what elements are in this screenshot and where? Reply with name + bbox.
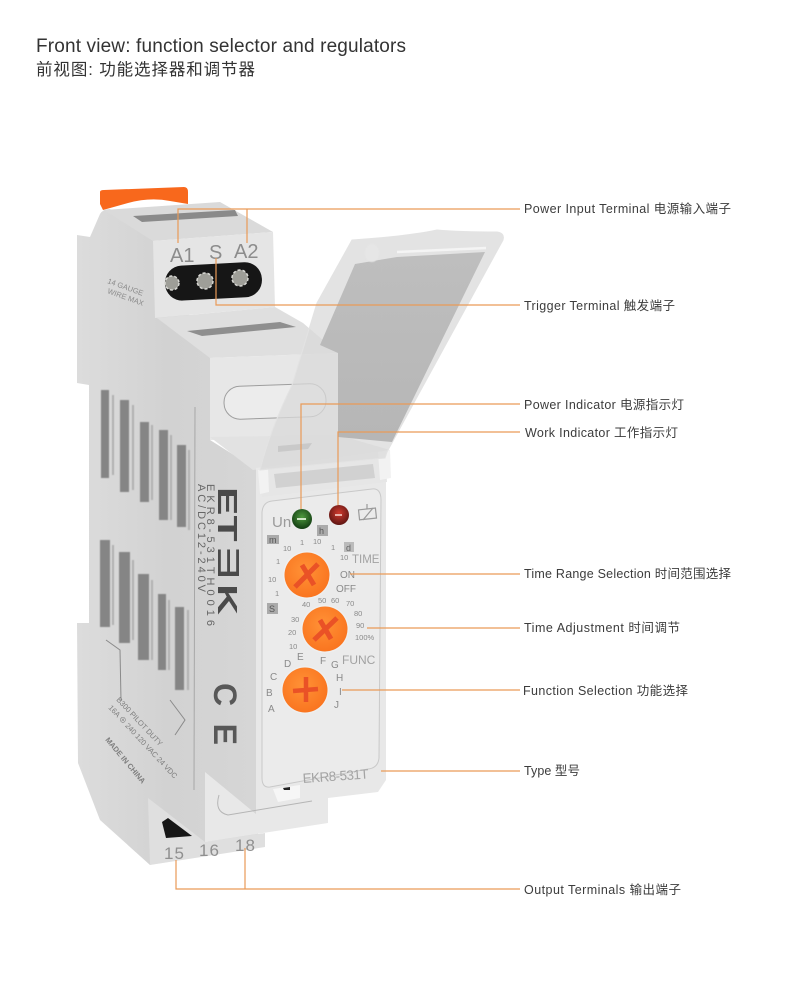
function scale: J <box>334 700 339 711</box>
time adjustment scale: 80 <box>354 609 362 618</box>
wiring and rating text: 16A ⊕ 240 120 VAC 24 VDC <box>107 703 180 781</box>
terminal labels: A1 <box>170 245 194 267</box>
function scale: G <box>331 660 339 671</box>
side specification table <box>100 390 190 690</box>
brand and model text on side: CE <box>207 683 243 745</box>
wire gauge text: 14 GAUGE <box>106 276 145 298</box>
device: relay illustration <box>77 187 503 865</box>
side housing <box>77 209 258 865</box>
time dial scale: 1 <box>275 589 279 598</box>
bottom terminal block <box>148 798 265 865</box>
wiring and rating text: B300 PILOT DUTY <box>115 695 165 748</box>
function scale: F <box>320 656 326 667</box>
leader: power indicator <box>301 404 520 509</box>
leader: output <box>176 848 520 889</box>
leader: time range <box>350 573 520 575</box>
leader: time adjustment <box>367 627 520 629</box>
time adjustment scale <box>288 596 375 651</box>
title: 前视图: 功能选择器和调节器 <box>36 60 256 79</box>
transparent lid <box>260 230 503 470</box>
output terminal numbers: 18 <box>235 836 255 855</box>
function scale: E <box>297 652 304 663</box>
hinge strip <box>258 450 387 497</box>
range letters <box>267 525 354 614</box>
function scale: A <box>268 704 275 715</box>
brand and model text on side: ET∃K <box>212 487 243 615</box>
relay symbol <box>359 504 376 520</box>
brand and model text on side: EKR8-531TH0016 <box>204 484 216 626</box>
leader: trigger <box>216 258 520 305</box>
time adjustment scale: 90 <box>356 621 364 630</box>
time dial scale: 10 <box>313 537 321 546</box>
wiring and rating text <box>103 640 185 786</box>
range letters: S <box>269 604 275 614</box>
wiring and rating text: MADE IN CHINA <box>103 736 148 786</box>
time adjustment scale: 60 <box>331 596 339 605</box>
label: work indicator: Work Indicator 工作指示灯 <box>525 425 678 440</box>
label: time range selection: Time Range Selection 时间范围选择 <box>524 567 731 581</box>
time adjustment dial <box>301 605 349 653</box>
lower block <box>157 307 390 470</box>
function scale <box>266 652 376 715</box>
orange release tab <box>100 187 188 210</box>
power LED green <box>292 509 312 529</box>
time adjustment scale: 70 <box>346 599 354 608</box>
range letters: d <box>346 543 351 553</box>
brand and model text on side: AC/DC12-240V <box>195 484 207 593</box>
callout labels <box>523 201 731 897</box>
terminal screws <box>165 270 248 290</box>
model label: EKR8-531T <box>302 766 369 786</box>
title <box>36 36 406 79</box>
seam line <box>194 407 195 790</box>
time dial scale: TIME <box>352 554 380 566</box>
wire gauge text <box>106 276 145 308</box>
indicators <box>272 505 349 531</box>
label: function selection: Function Selection 功能选择 <box>523 684 688 698</box>
range letters: m <box>269 535 276 545</box>
time adjustment scale: 30 <box>291 615 299 624</box>
leader: type <box>381 770 520 772</box>
label: power indicator: Power Indicator 电源指示灯 <box>524 397 684 412</box>
output terminal numbers: 16 <box>199 841 219 860</box>
inner face <box>262 489 381 787</box>
label: output terminals: Output Terminals 输出端子 <box>524 882 681 897</box>
function scale: FUNC <box>342 653 376 667</box>
work LED red <box>329 505 349 525</box>
time dial scale: 10 <box>340 553 348 562</box>
time range dial <box>283 551 331 599</box>
terminal labels: S <box>209 242 222 264</box>
top terminal block <box>104 202 275 318</box>
callout leader lines <box>176 209 520 889</box>
time dial scale <box>268 537 380 598</box>
label: type: Type 型号 <box>524 764 580 778</box>
function scale: I <box>339 687 342 698</box>
screw recess <box>164 261 263 301</box>
leader: work indicator <box>338 432 520 505</box>
time dial scale: 1 <box>300 538 304 547</box>
function scale: B <box>266 688 273 699</box>
time dial scale: 10 <box>268 575 276 584</box>
label: power input terminal: Power Input Terminal 电源输入端子 <box>524 201 731 216</box>
time adjustment scale: 50 <box>318 596 326 605</box>
time adjustment scale: 100% <box>355 633 375 642</box>
output terminal numbers <box>164 836 255 863</box>
function dial <box>281 666 329 714</box>
label: trigger terminal: Trigger Terminal 触发端子 <box>524 298 675 313</box>
title: Front view: function selector and regulators <box>36 36 406 57</box>
indicators: Un <box>272 514 291 531</box>
label: time adjustment: Time Adjustment 时间调节 <box>524 621 680 635</box>
time adjustment scale: 10 <box>289 642 297 651</box>
terminal labels: A2 <box>234 241 258 263</box>
time dial scale: 10 <box>283 544 291 553</box>
time adjustment scale: 40 <box>302 600 310 609</box>
range letters: h <box>319 526 324 536</box>
leader: power input <box>178 209 520 243</box>
brand and model text on side <box>195 484 243 745</box>
time dial scale: 1 <box>331 543 335 552</box>
function scale: C <box>270 672 277 683</box>
function scale: D <box>284 659 291 670</box>
time dial scale: OFF <box>336 584 356 595</box>
front panel and foot <box>205 450 391 842</box>
terminal labels <box>170 241 258 267</box>
wire gauge text: WIRE MAX <box>106 286 145 308</box>
output terminal numbers: 15 <box>164 844 184 863</box>
leader: function <box>342 689 520 691</box>
time adjustment scale: 20 <box>288 628 296 637</box>
function scale: H <box>336 673 343 684</box>
time dial scale: ON <box>340 570 355 581</box>
time dial scale: 1 <box>276 557 280 566</box>
